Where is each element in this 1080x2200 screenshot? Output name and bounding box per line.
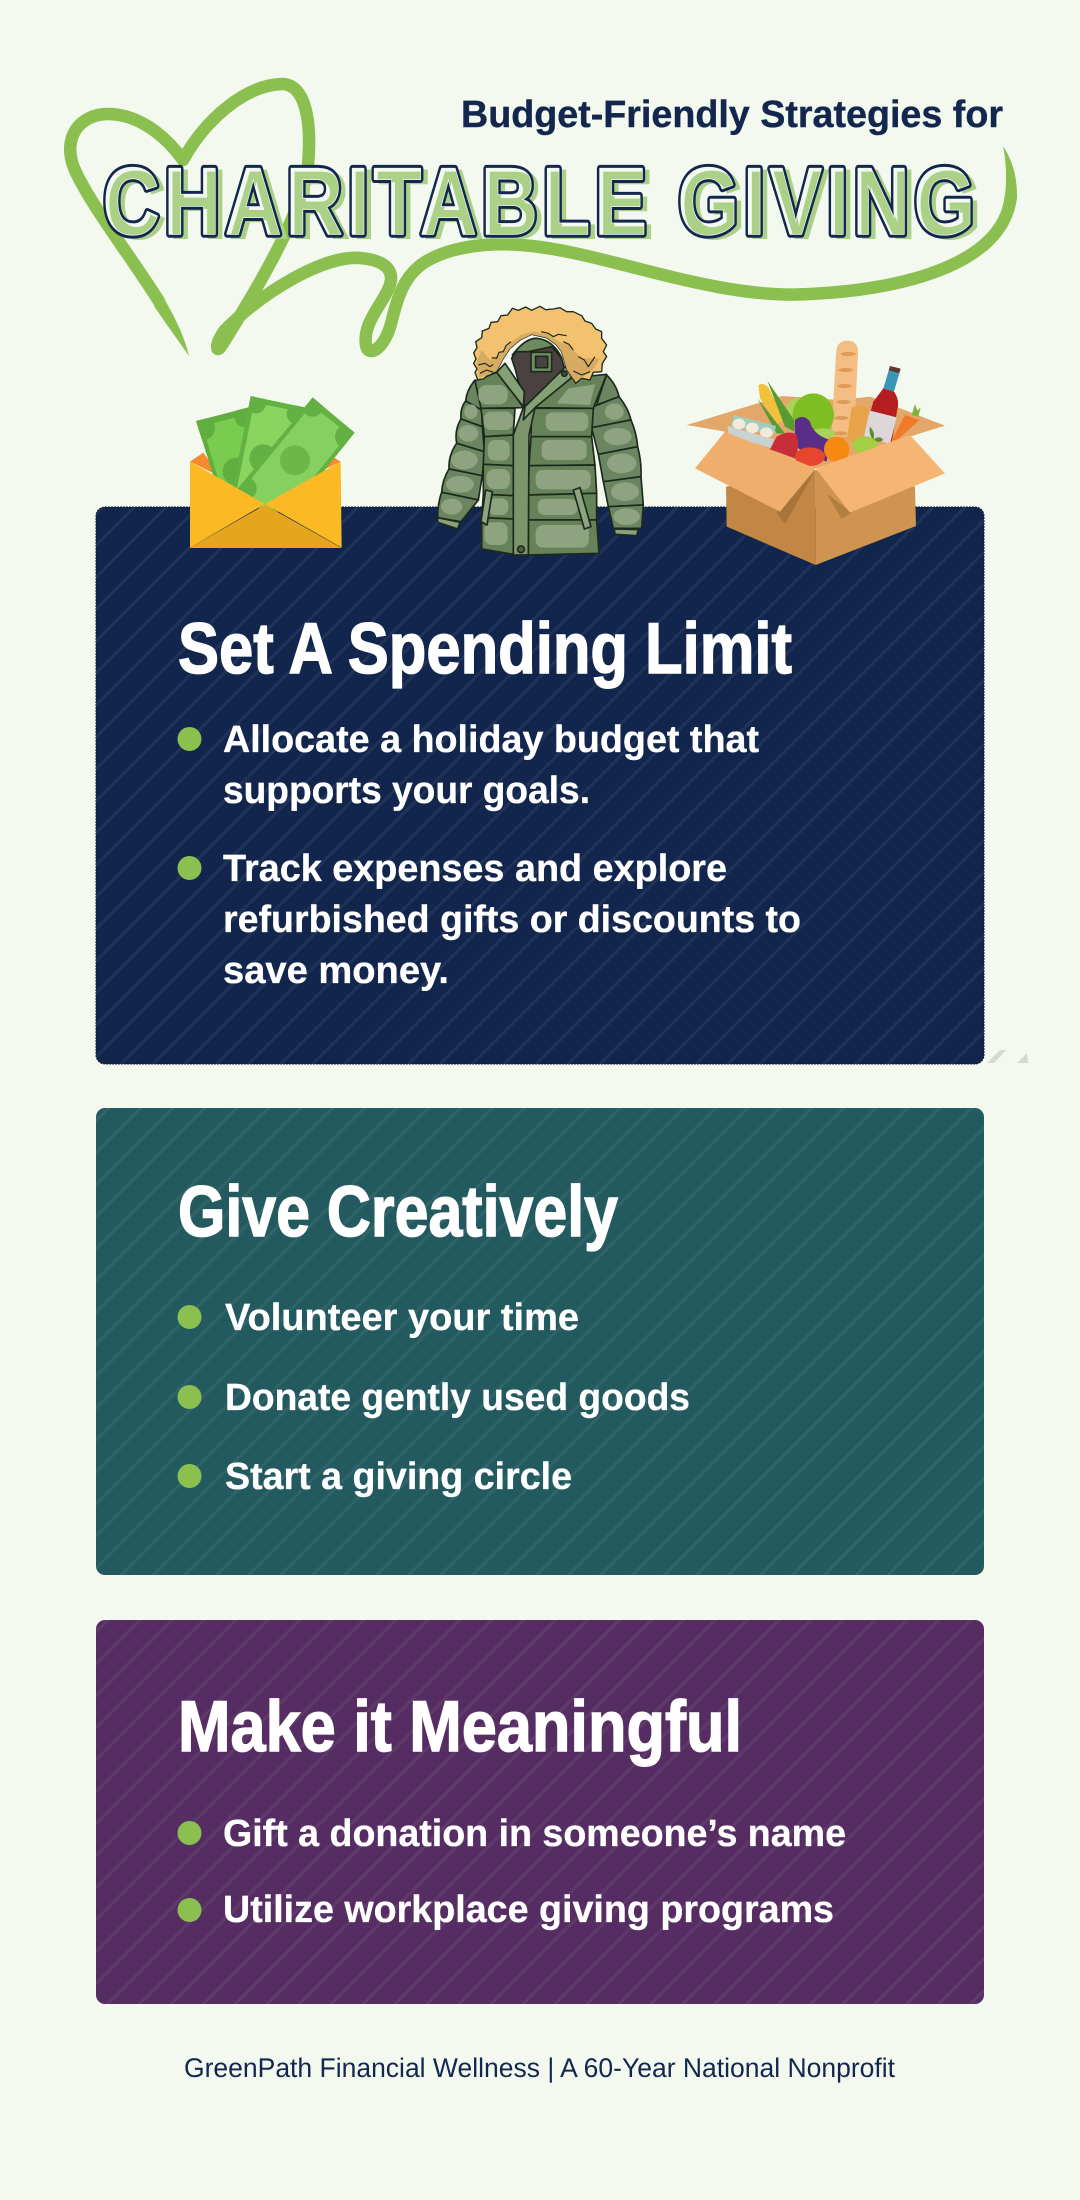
jacket body — [475, 372, 607, 555]
body highlights — [478, 384, 595, 548]
front flaps — [695, 432, 816, 512]
bullet: workplace giving: Utilize workplace giving programs — [223, 1889, 834, 1931]
bread loaf — [847, 406, 869, 443]
icon: puffer jacket — [438, 306, 643, 555]
lettuce — [787, 393, 835, 438]
tomato — [795, 447, 825, 466]
bullet: gift a donation: Gift a donation in someone’s name — [223, 1813, 846, 1855]
heading: make it meaningful: Make it Meaningful — [178, 1687, 742, 1767]
placket with button — [513, 408, 535, 555]
box body — [726, 470, 816, 565]
bullet: track expenses: refurbished gifts or discounts to — [223, 899, 801, 941]
eggplant — [795, 417, 830, 462]
icon: grocery donation box — [687, 341, 945, 565]
bullet: track expenses: save money. — [223, 950, 449, 992]
corn — [757, 381, 794, 433]
title: Charitable Giving: CHARITABLE GIVING — [103, 149, 975, 255]
fur scribbles — [478, 332, 595, 375]
bullet: allocate a holiday budget: Allocate a holiday budget that — [223, 719, 759, 761]
right sleeve — [592, 375, 643, 536]
bullet: donate: Donate gently used goods — [225, 1377, 690, 1419]
orange — [824, 437, 849, 462]
panel: set a spending limit — [96, 507, 984, 1064]
fur inner shade — [477, 332, 600, 382]
bullet: track expenses: Track expenses and explore — [223, 848, 727, 890]
back flaps — [687, 396, 945, 468]
heading: set a spending limit: Set A Spending Limit — [178, 609, 792, 689]
hood interior — [512, 338, 565, 407]
title: Charitable Giving: CHARITABLE GIVING — [106, 152, 978, 258]
left sleeve — [438, 380, 484, 529]
stray stripe fragments — [987, 1050, 1028, 1063]
pockets — [481, 488, 591, 529]
sleeve highlights — [441, 403, 640, 525]
icon: envelope with money — [189, 393, 358, 548]
apple and leaves — [852, 427, 883, 454]
baguette — [831, 341, 858, 437]
fur trim — [474, 306, 607, 383]
footer: GreenPath Financial Wellness | A 60-Year National Nonprofit — [184, 2053, 895, 2083]
bullet: giving circle: Start a giving circle — [225, 1456, 572, 1498]
wine bottle — [864, 366, 901, 444]
red pepper — [770, 432, 798, 458]
bullet: allocate a holiday budget — [178, 719, 759, 812]
carrot — [892, 404, 921, 441]
bullet: volunteer: Volunteer your time — [225, 1297, 579, 1339]
title: Charitable Giving: CHARITABLE GIVING — [103, 149, 975, 255]
heading: give creatively: Give Creatively — [178, 1172, 618, 1252]
bullet: track expenses — [178, 848, 801, 992]
flap shadows — [777, 470, 816, 524]
collar — [497, 363, 572, 420]
bullet: allocate a holiday budget: supports your goals. — [223, 770, 590, 812]
egg carton — [728, 415, 776, 448]
panel: give creatively — [96, 1108, 984, 1575]
title: Charitable Giving: CHARITABLE GIVING — [109, 152, 980, 258]
panel: make it meaningful — [96, 1620, 984, 2004]
subtitle: Budget-Friendly Strategies for — [461, 94, 1003, 136]
heart swoosh ribbon — [70, 84, 1017, 356]
